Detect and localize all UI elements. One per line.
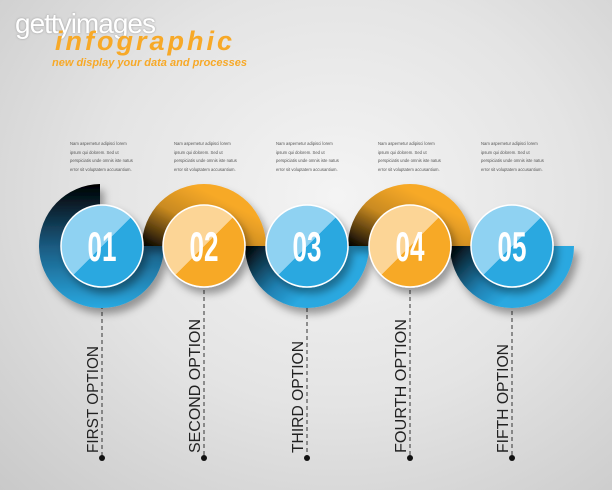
ring 1	[39, 184, 164, 308]
circle 04: 04	[396, 224, 425, 271]
logo: gettyimages: gettyimages	[15, 8, 155, 39]
ring 3	[245, 246, 369, 308]
labels: SECOND OPTION	[187, 319, 204, 453]
labels: THIRD OPTION	[290, 341, 307, 453]
circle 03: 03	[293, 224, 321, 271]
dashed lines	[102, 290, 512, 458]
text block 1: Nam aspernetur adipisci lorem ipsum qui dolorem. Sed ut perspiciatis unde omnis iste natus error sit voluptatem accusantium.	[70, 141, 133, 172]
title: infographic	[55, 26, 235, 56]
text block 2: Nam aspernetur adipisci lorem ipsum qui dolorem. Sed ut perspiciatis unde omnis iste natus error sit voluptatem accusantium.	[174, 141, 237, 172]
ring 2	[142, 184, 266, 246]
labels	[85, 319, 512, 453]
ring 4	[348, 184, 472, 246]
circle 01	[61, 205, 143, 287]
labels: FIFTH OPTION	[495, 344, 512, 453]
circle 05	[471, 205, 553, 287]
ring 5	[450, 246, 574, 308]
subtitle: new display your data and processes	[52, 57, 247, 69]
text block 5: Nam aspernetur adipisci lorem ipsum qui dolorem. Sed ut perspiciatis unde omnis iste natus error sit voluptatem accusantium.	[481, 141, 544, 172]
circle 02: 02	[190, 224, 218, 271]
text block 3: Nam aspernetur adipisci lorem ipsum qui dolorem. Sed ut perspiciatis unde omnis iste natus error sit voluptatem accusantium.	[276, 141, 339, 172]
text block 4: Nam aspernetur adipisci lorem ipsum qui dolorem. Sed ut perspiciatis unde omnis iste natus error sit voluptatem accusantium.	[378, 141, 441, 172]
circle 02	[163, 205, 245, 287]
circle 01: 01	[88, 224, 116, 271]
circle 03	[266, 205, 348, 287]
labels: FOURTH OPTION	[393, 319, 410, 453]
circle 05: 05	[498, 224, 526, 271]
labels: FIRST OPTION	[85, 346, 102, 453]
circle 04	[369, 205, 451, 287]
